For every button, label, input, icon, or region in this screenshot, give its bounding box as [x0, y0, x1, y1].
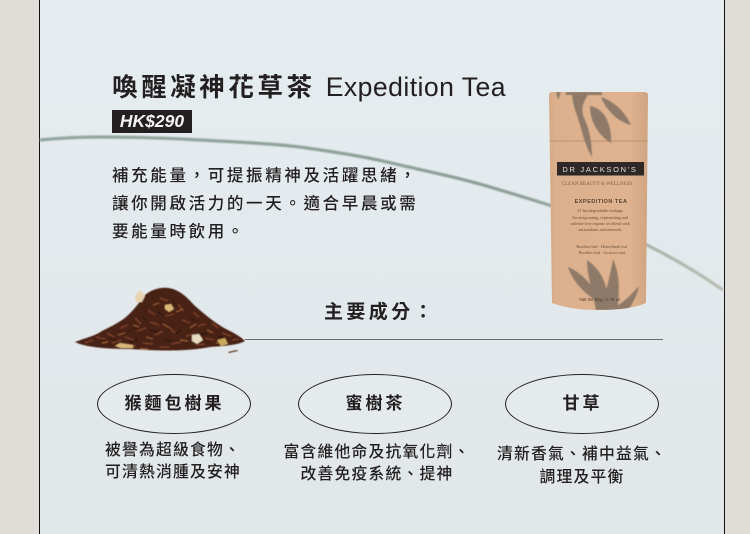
leaf print top: [556, 92, 631, 157]
product tube: Rooibos leaf · Licorice root: [579, 250, 626, 255]
ingredient 1: description: 可清熱消腫及安神: [105, 464, 241, 481]
tea leaves pile: [74, 286, 246, 354]
ingredient 3: oval label: [505, 374, 659, 434]
ingredient 2: description: 富含維他命及抗氧化劑、: [284, 444, 470, 461]
product tube: antioxidants and minerals: [578, 227, 622, 232]
ingredient 3: oval label: 甘草: [562, 394, 602, 413]
product tube: Rooibos leaf · Honeybush leaf: [576, 244, 628, 249]
ingredient 1: description: [105, 441, 241, 481]
price tag: [112, 110, 192, 133]
description text: 補充能量，可提振精神及活躍思緒，: [112, 167, 418, 185]
ingredient 2: oval label: 蜜樹茶: [346, 394, 406, 413]
ingredients heading: 主要成分：: [324, 302, 436, 323]
ingredient 1: oval label: 猴麵包樹果: [124, 394, 224, 413]
product tube: CLEAN BEAUTY & WELLNESS: [562, 182, 632, 187]
product tube: EXPEDITION TEA: [575, 199, 627, 205]
tube body: [545, 90, 651, 312]
ingredient 2: description: 改善免疫系統、提神: [300, 466, 453, 482]
divider line: [245, 339, 663, 340]
product tube: An invigorating, replenishing and: [572, 215, 629, 221]
ingredient 2: description: [284, 443, 470, 482]
description text: [112, 166, 418, 241]
tube label band: [557, 162, 644, 176]
price tag: HK$290: [120, 111, 184, 131]
title: 喚醒凝神花草茶 Expedition Tea: [112, 72, 506, 102]
product tube: [549, 92, 648, 310]
product tube: DR JACKSON'S: [562, 165, 638, 174]
ingredient 3: description: 調理及平衡: [540, 469, 624, 486]
ingredient 3: description: 清新香氣、補中益氣、: [497, 446, 667, 463]
leaf print bottom: [568, 259, 639, 310]
ingredient 1: oval label: [97, 374, 251, 434]
product tube: Net Wt 50g / 1.76 oz: [579, 297, 621, 302]
description text: 讓你開啟活力的一天。適合早晨或需: [112, 195, 418, 213]
product tube: caffeine-free organic tea blend with: [570, 221, 631, 226]
ingredient 2: oval label: [298, 374, 452, 434]
product tube: 21 biodegradable teabags: [577, 208, 623, 213]
description text: 要能量時飲用。: [112, 223, 246, 241]
ingredient 1: description: 被譽為超級食物、: [105, 442, 241, 459]
ingredient 3: description: [497, 445, 667, 486]
